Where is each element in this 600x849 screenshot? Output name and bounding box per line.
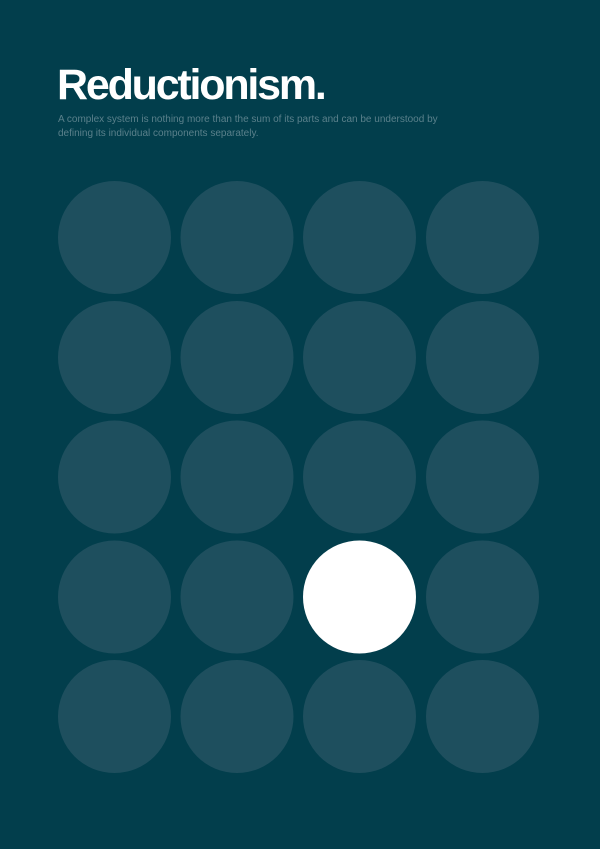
description text: defining its individual components separately. — [58, 128, 258, 139]
description text: A complex system is nothing more than the sum of its parts and can be understood by — [58, 114, 438, 125]
title: Reductionism. — [57, 61, 325, 109]
description text — [58, 114, 438, 139]
